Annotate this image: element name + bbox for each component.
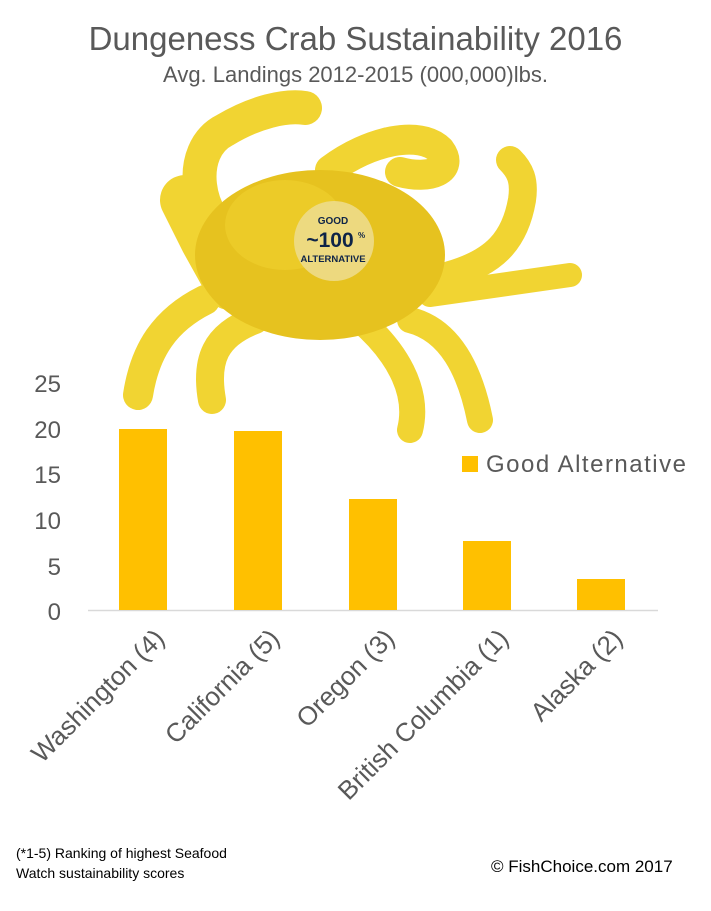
title: Dungeness Crab Sustainability 2016 xyxy=(89,20,622,57)
crab body xyxy=(195,170,445,340)
x labels: Alaska (2) xyxy=(524,623,628,727)
badge xyxy=(294,201,374,281)
legend: Good Alternative xyxy=(486,451,686,478)
x labels: British Columbia (1) xyxy=(332,623,514,806)
x labels: Oregon (3) xyxy=(290,623,400,733)
bar chart: 5 xyxy=(48,554,61,581)
badge: GOOD xyxy=(318,216,348,227)
bar chart: 20 xyxy=(34,417,61,444)
bar chart: 10 xyxy=(34,508,61,535)
legs xyxy=(138,300,480,430)
copyright: © FishChoice.com 2017 xyxy=(491,857,673,876)
badge: % xyxy=(358,231,365,240)
badge: ALTERNATIVE xyxy=(300,254,366,265)
bar chart: 25 xyxy=(34,371,61,398)
bar chart: 0 xyxy=(48,599,61,626)
left claw xyxy=(185,107,305,285)
footnote xyxy=(16,845,227,881)
x labels: Washington (4) xyxy=(25,623,170,768)
x labels xyxy=(25,623,628,806)
right claw xyxy=(330,140,570,295)
footnote: (*1-5) Ranking of highest Seafood xyxy=(16,845,227,861)
x labels: California (5) xyxy=(159,623,285,749)
badge: ~100 xyxy=(306,229,354,252)
subtitle: Avg. Landings 2012-2015 (000,000)lbs. xyxy=(163,62,548,87)
footnote: Watch sustainability scores xyxy=(16,865,184,881)
bar chart: 15 xyxy=(34,462,61,489)
